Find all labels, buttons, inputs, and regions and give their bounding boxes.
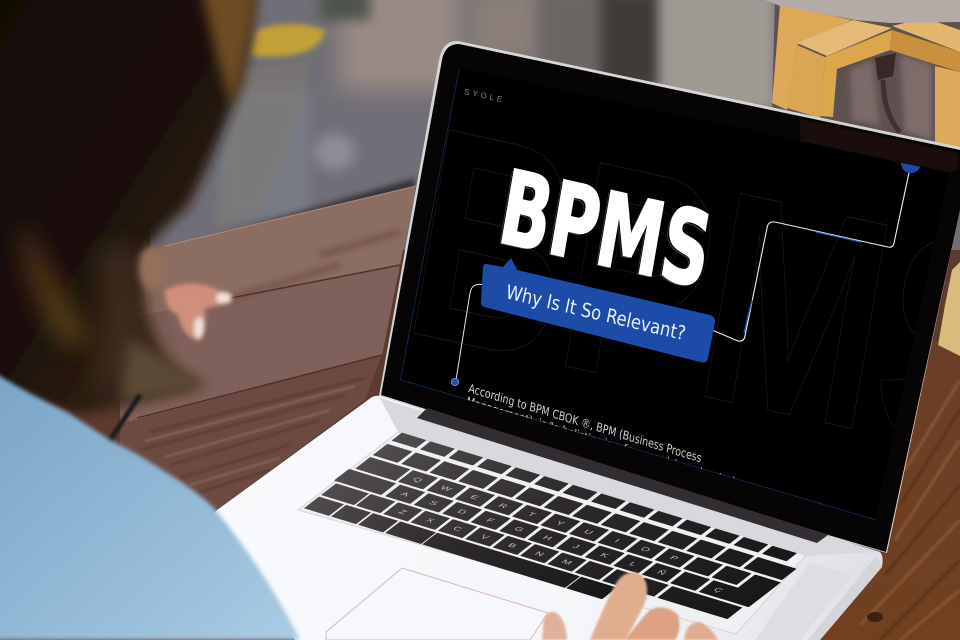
dark band above the table edge [165, 178, 415, 248]
key letters [376, 476, 743, 607]
wooden lamp frame, top right [765, 0, 960, 356]
home row [335, 470, 737, 599]
connector line, upper right [712, 168, 910, 341]
wooden table, right side [815, 340, 960, 640]
screen frame line [400, 68, 875, 520]
connector blue highlights [744, 232, 861, 333]
bottom row [305, 497, 616, 599]
number row [374, 444, 795, 579]
function row [393, 433, 796, 561]
title: BPMS [492, 148, 719, 311]
connector node, upper right [901, 162, 920, 173]
speaker grille right [755, 562, 853, 640]
speech bubble [481, 258, 715, 362]
lamp plug and cable [875, 53, 900, 132]
connector node, lower left [451, 378, 459, 386]
cushion on top of the frame [765, 0, 960, 23]
index finger [590, 572, 647, 640]
laptop lid outer rim [379, 41, 960, 553]
qwerty row [339, 458, 780, 607]
person: shoulder strap shadow [108, 395, 140, 443]
keyboard [301, 432, 811, 633]
person: fingers on keyboard [542, 572, 718, 640]
logo: SYOLE [464, 87, 506, 105]
bezel warm reflection at the top right [800, 119, 958, 172]
laptop hinge [417, 408, 828, 543]
person: hand on face [139, 246, 232, 341]
person: glasses [215, 24, 325, 225]
title outline shadow: BPMS [490, 152, 717, 312]
middle finger [625, 607, 679, 640]
keyboard well [298, 432, 806, 634]
ring finger [684, 622, 718, 640]
body text: According to BPM CBOK ®, BPM (Business Process [467, 381, 703, 465]
thumb [542, 612, 567, 640]
wooden table, left side [120, 186, 416, 512]
lower row [322, 484, 741, 618]
person: hair highlights [20, 0, 258, 400]
screen [389, 62, 960, 525]
connector line, lower left [456, 284, 484, 380]
laptop lid black bezel [381, 44, 960, 552]
body text: Management), is "a holistic view for organizing, structuring [465, 394, 748, 493]
trackpad [326, 568, 548, 640]
laptop base [213, 396, 883, 640]
person: hair [0, 0, 256, 415]
upper deck between hinge and keyboard [380, 398, 880, 556]
subtitle: Why Is It So Relevant? [504, 280, 688, 345]
person: shirt [0, 370, 300, 640]
